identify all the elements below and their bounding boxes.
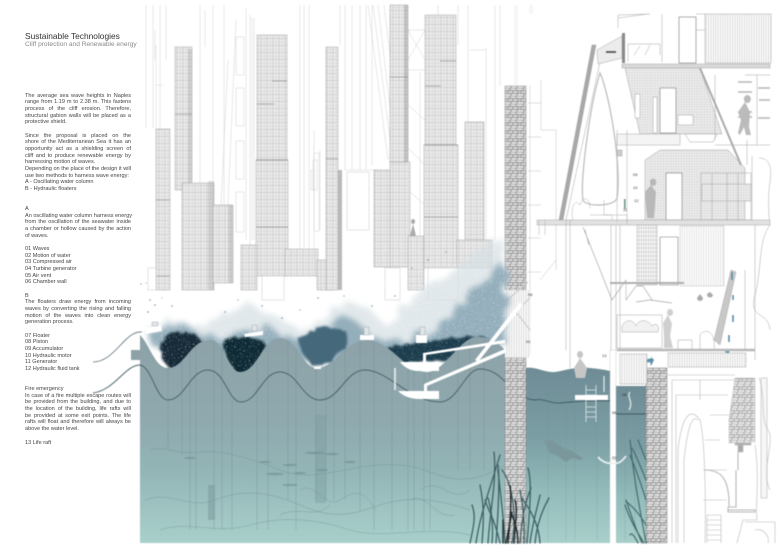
gabion towers [156, 5, 492, 290]
arch [678, 414, 705, 543]
blue vent arrow [716, 350, 730, 359]
right rock outline [747, 140, 771, 330]
text: method B: motion of the waves into clean energy [25, 313, 131, 319]
title: Sustainable Technologies [25, 31, 120, 41]
tower 5 [256, 35, 288, 276]
green accent [624, 199, 626, 209]
tower 12 [408, 236, 424, 290]
floor details [539, 130, 627, 235]
legend: method A: 05 Air vent [25, 273, 51, 279]
chamber numbers: 08 [622, 392, 627, 397]
door lower [666, 173, 682, 220]
text: proposal: shore of the Mediterranean Sea it has an [25, 139, 131, 145]
piston arm one [423, 340, 505, 363]
text: method A: a chamber or hollow caused by the action [25, 226, 131, 232]
building section lower right [667, 375, 775, 543]
mid blue spray [150, 262, 505, 360]
terrace railing [628, 14, 705, 62]
text: method B [25, 293, 131, 325]
sea body with wave profile [140, 335, 505, 543]
upper vertical hatch [705, 14, 771, 63]
stair down [637, 225, 657, 285]
number tags: 11 [623, 207, 628, 212]
floater two [398, 391, 439, 399]
legend: method B: 07 Floater [25, 333, 50, 339]
legend: method A: 04 Turbine generator [25, 266, 76, 272]
water right of shaft [616, 386, 646, 543]
small stand [152, 322, 425, 335]
lower hatch [680, 226, 724, 286]
scaffold beside wall [505, 5, 556, 358]
legend: method B: 12 Hydraulic fluid tank [25, 366, 80, 372]
pipe [705, 452, 755, 512]
side slab [761, 378, 767, 498]
text: fire emergency: rafts will float and therefore will always be [25, 419, 131, 425]
spray speckle [145, 325, 275, 375]
text: proposal: harnessing motion of waves. [25, 159, 95, 165]
text: fire emergency: be provided at some exit points. The life [25, 413, 131, 419]
chamber numbers: 02 [612, 455, 617, 460]
text: method A: An oscillating water column harness energy [25, 213, 132, 219]
blue air arrow [635, 355, 654, 372]
submerged structure lines [146, 414, 503, 536]
legend: method A: 06 Chamber wall [25, 279, 67, 285]
text: proposal: Depending on the place of the design it will [25, 166, 131, 172]
diagonal arm [475, 302, 523, 362]
fish shoal [184, 452, 356, 486]
text: proposal: A - Oscillating water column [25, 179, 93, 185]
dark trough one [160, 332, 206, 372]
legend: life raft: 13 Life raft [25, 440, 51, 446]
tower 4 [213, 205, 233, 283]
stone-filled vent [729, 378, 755, 443]
tower 8 [326, 47, 342, 290]
vertical lines [548, 372, 635, 540]
legend: method A: 01 Waves [25, 246, 49, 252]
grey stair diagonal [714, 270, 736, 345]
tower 10 [424, 15, 458, 268]
teardrop void [582, 73, 618, 205]
dark underwater column [208, 485, 215, 520]
tower 6 [241, 245, 257, 290]
reeds right [625, 440, 646, 543]
under-floor hatch [620, 354, 647, 384]
text: wave heights [25, 93, 131, 125]
lower door [660, 237, 678, 285]
upper wall hatch [617, 150, 622, 156]
chamber numbers [526, 292, 715, 460]
slanted strut [583, 227, 626, 300]
diver [544, 440, 583, 462]
subtitle: Cliff protection and Renewable energy [25, 41, 137, 48]
right furniture block [715, 75, 770, 145]
white shaft [610, 350, 616, 460]
floater machine whites [145, 302, 523, 399]
text: wave heights: range from 1.19 m to 2.38 m. This fastens [25, 99, 131, 105]
text: method A [25, 206, 132, 239]
text: fire emergency [25, 386, 131, 432]
dotted riser [394, 368, 396, 390]
light spray cloud [150, 238, 505, 360]
stone wall left upper [505, 86, 526, 290]
wave line two [93, 365, 520, 402]
dark trough two [222, 336, 268, 375]
dark trough four [385, 336, 488, 362]
text: proposal: Since the proposal is placed on the [25, 133, 131, 139]
main floor slab [537, 220, 770, 225]
person silhouette upper [738, 95, 751, 135]
text: method B: B [25, 293, 29, 299]
floater one [400, 362, 439, 371]
tower 7 [285, 249, 333, 290]
text: wave heights: The average sea wave heights in Naples [25, 93, 131, 99]
text: fire emergency: Fire emergency [25, 386, 64, 392]
legend: method B: 10 Hydraulic motor [25, 353, 72, 359]
stone wall left lower [505, 358, 526, 543]
person on raft [574, 351, 587, 378]
floating raft [575, 395, 608, 400]
chamber numbers: 03 [635, 354, 640, 359]
text: proposal: opportunity act as a shielding screen of [25, 146, 131, 152]
number tags: 12 [634, 198, 639, 203]
roof planter [597, 14, 650, 64]
tower 2 [175, 47, 192, 190]
text: method A: A [25, 206, 29, 212]
chamber numbers: 01 [526, 339, 531, 344]
vertical section lines [566, 220, 626, 368]
text: proposal: cliff and to produce renewable energy by [25, 153, 131, 159]
chamber numbers: 05 [710, 361, 715, 366]
number tags [623, 172, 639, 212]
legend: method A: 02 Motion of water [25, 253, 71, 259]
text: wave heights: structural gabion walls will be placed as a [25, 113, 131, 119]
building section upper [537, 14, 771, 384]
right rock outlines [737, 378, 775, 543]
legend: method B: 09 Accumulator [25, 346, 63, 352]
seated group [617, 286, 672, 348]
text: fire emergency: In case of a fire multiple escape routes will [25, 393, 131, 399]
background line drawing of cliff [146, 5, 500, 290]
slanted roof wall [559, 45, 596, 220]
lower slab [617, 349, 755, 351]
text: proposal: use two methods to harness wave energy: [25, 173, 129, 179]
chamber numbers: 13 [602, 353, 607, 358]
vent foot [735, 443, 751, 452]
mid floor slab [617, 134, 680, 145]
grid room [625, 68, 722, 134]
wave line in chamber [505, 372, 646, 414]
hanging lamps [697, 292, 713, 301]
text: method B: waves by converting the rising and falling [25, 306, 131, 312]
text: fire emergency: the location of the building, life rafts will [25, 406, 131, 412]
stair grid room [645, 150, 745, 220]
furniture [678, 331, 714, 350]
slanted glazing [700, 68, 741, 165]
tower 11 [457, 122, 492, 268]
text: fire emergency: above the water level. [25, 426, 79, 432]
slanted wall inner line [566, 62, 600, 220]
upper floor slab [622, 64, 770, 68]
kitchen units [701, 173, 751, 220]
legend: method A [25, 246, 76, 285]
teal trough three [297, 326, 348, 366]
legend: method B: 08 Piston [25, 339, 48, 345]
white float arrows [598, 376, 631, 463]
piston arm two [424, 349, 505, 392]
tower 9 [374, 5, 410, 267]
wall ledge at sea edge [131, 350, 141, 360]
floating pads [145, 325, 427, 369]
tower 1 [156, 129, 170, 290]
text: proposal: B - Hydraulic floaters [25, 186, 76, 192]
tower 3 [182, 181, 214, 290]
spray and waves [140, 238, 505, 375]
blue air motes [729, 272, 733, 342]
right sea chamber [505, 292, 715, 543]
reeds left [470, 452, 549, 543]
stone wall right [646, 368, 667, 543]
lower mid slab [610, 282, 684, 284]
leader line one [93, 332, 142, 362]
chamber numbers: 06 [612, 410, 617, 415]
small silhouette on cliff [410, 219, 416, 236]
masonry frame [667, 375, 735, 543]
grey standing person [663, 309, 673, 348]
text: method A: of waves. [25, 233, 48, 239]
text: wave heights: process of the cliff erosion. Therefore, [25, 106, 131, 112]
legend: method B [25, 333, 80, 372]
dark underwater column [315, 415, 326, 503]
openings in base of cliff [148, 172, 458, 300]
lower ladder [707, 515, 721, 543]
number tags: 10 [633, 185, 638, 190]
legend: method A: 03 Compressed air [25, 259, 72, 265]
number tags: 09 [633, 172, 638, 177]
water left of shaft [526, 368, 610, 543]
person centre [645, 179, 656, 218]
legend: method B: 11 Generator [25, 359, 57, 365]
text: method B: The floaters draw energy from incoming [25, 299, 131, 305]
chamber numbers: 06 [528, 292, 533, 297]
ladder [586, 385, 596, 422]
chamber numbers: 04 [688, 353, 693, 358]
text: method B: generation process. [25, 319, 74, 325]
mid furniture [635, 94, 717, 142]
text: method A: from the oscillation of the seawater inside [25, 219, 131, 225]
text: fire emergency: be provided from the building, and due to [25, 399, 131, 405]
text: proposal [25, 133, 132, 192]
text: wave heights: protective shield. [25, 119, 67, 125]
loose droplets [140, 251, 447, 319]
white room block [660, 88, 676, 133]
upper door [679, 17, 696, 63]
